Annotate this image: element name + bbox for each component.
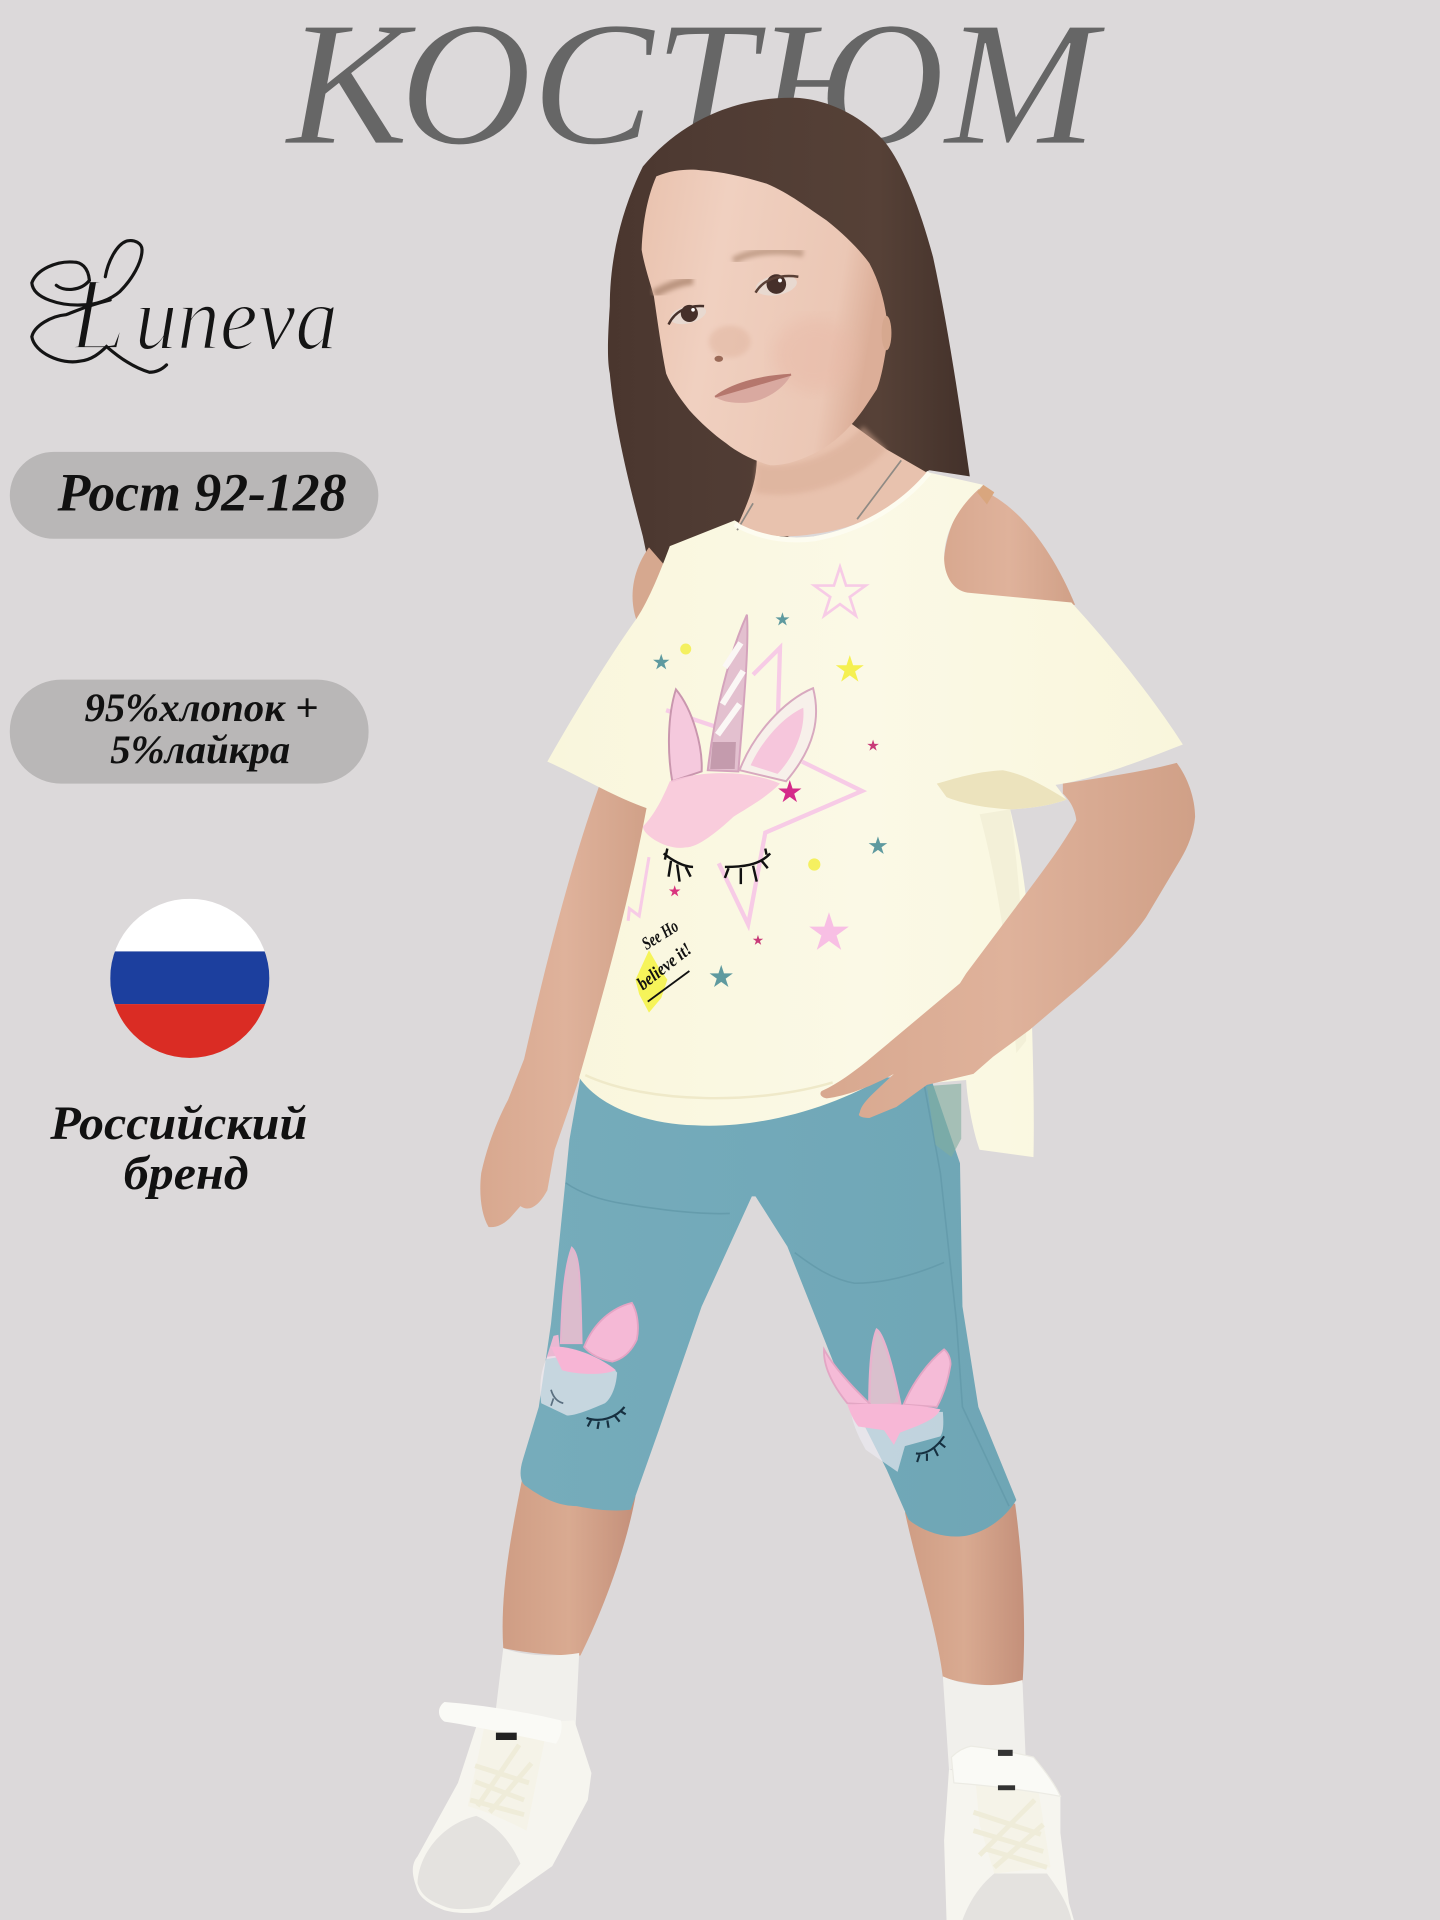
caption: Russian brand: бренд (124, 1147, 249, 1200)
eyelashes (664, 849, 770, 884)
icon: Russian flag circle (110, 899, 269, 1058)
eye left (668, 302, 708, 327)
hair (608, 98, 970, 576)
pill: height range (10, 452, 378, 539)
girl in unicorn outfit (413, 98, 1195, 1920)
big star outline (666, 648, 862, 924)
t-shirt (547, 473, 1183, 1157)
mouth (715, 375, 791, 403)
face (642, 170, 891, 465)
shirt slogan (633, 916, 695, 1002)
leggings (521, 1078, 1016, 1537)
bare left shoulder (633, 547, 673, 621)
pill: fabric composition (10, 680, 369, 784)
necklace (737, 460, 901, 530)
left arm and hand (480, 784, 650, 1227)
right arm and hand (820, 763, 1195, 1118)
caption: Russian brand (49, 1097, 307, 1200)
yellow splash behind slogan (636, 950, 667, 1013)
right ear (740, 688, 816, 781)
neck (737, 422, 927, 536)
collar (735, 473, 929, 540)
shirt slogan: believe it! (633, 939, 695, 994)
eye right (754, 272, 799, 299)
green side strip of leggings (927, 1084, 961, 1157)
left knee unicorn (540, 1248, 638, 1429)
pill: fabric composition: 5%лайкра (110, 727, 290, 772)
leggings seams (566, 1086, 1009, 1506)
caption: Russian brand: Российский (49, 1097, 307, 1150)
tulle (643, 773, 780, 848)
logo: Luneva (32, 241, 338, 372)
logo: Luneva: L (67, 255, 127, 372)
ear (882, 316, 891, 350)
left sneaker (413, 1702, 591, 1913)
right knee unicorn (824, 1330, 951, 1472)
shirt slogan: See Ho (638, 916, 682, 954)
bare right shoulder (943, 487, 1075, 605)
cheek blush (773, 318, 856, 392)
stars (814, 567, 866, 616)
pill: fabric composition: 95%хлопок + (84, 685, 318, 730)
left ear (669, 689, 702, 781)
shirt shading (585, 485, 1067, 1098)
pill: height range: Рост 92-128 (57, 463, 347, 523)
eyebrows (733, 251, 803, 261)
nose (709, 326, 751, 362)
neck shadow (754, 426, 887, 495)
shirt print: unicorn star (628, 567, 887, 1013)
horn (708, 615, 747, 771)
small star on left edge (628, 857, 649, 921)
logo: Luneva: uneva (135, 268, 338, 369)
shins (503, 1476, 1024, 1686)
socks (493, 1648, 1026, 1769)
right sneaker (944, 1746, 1074, 1920)
